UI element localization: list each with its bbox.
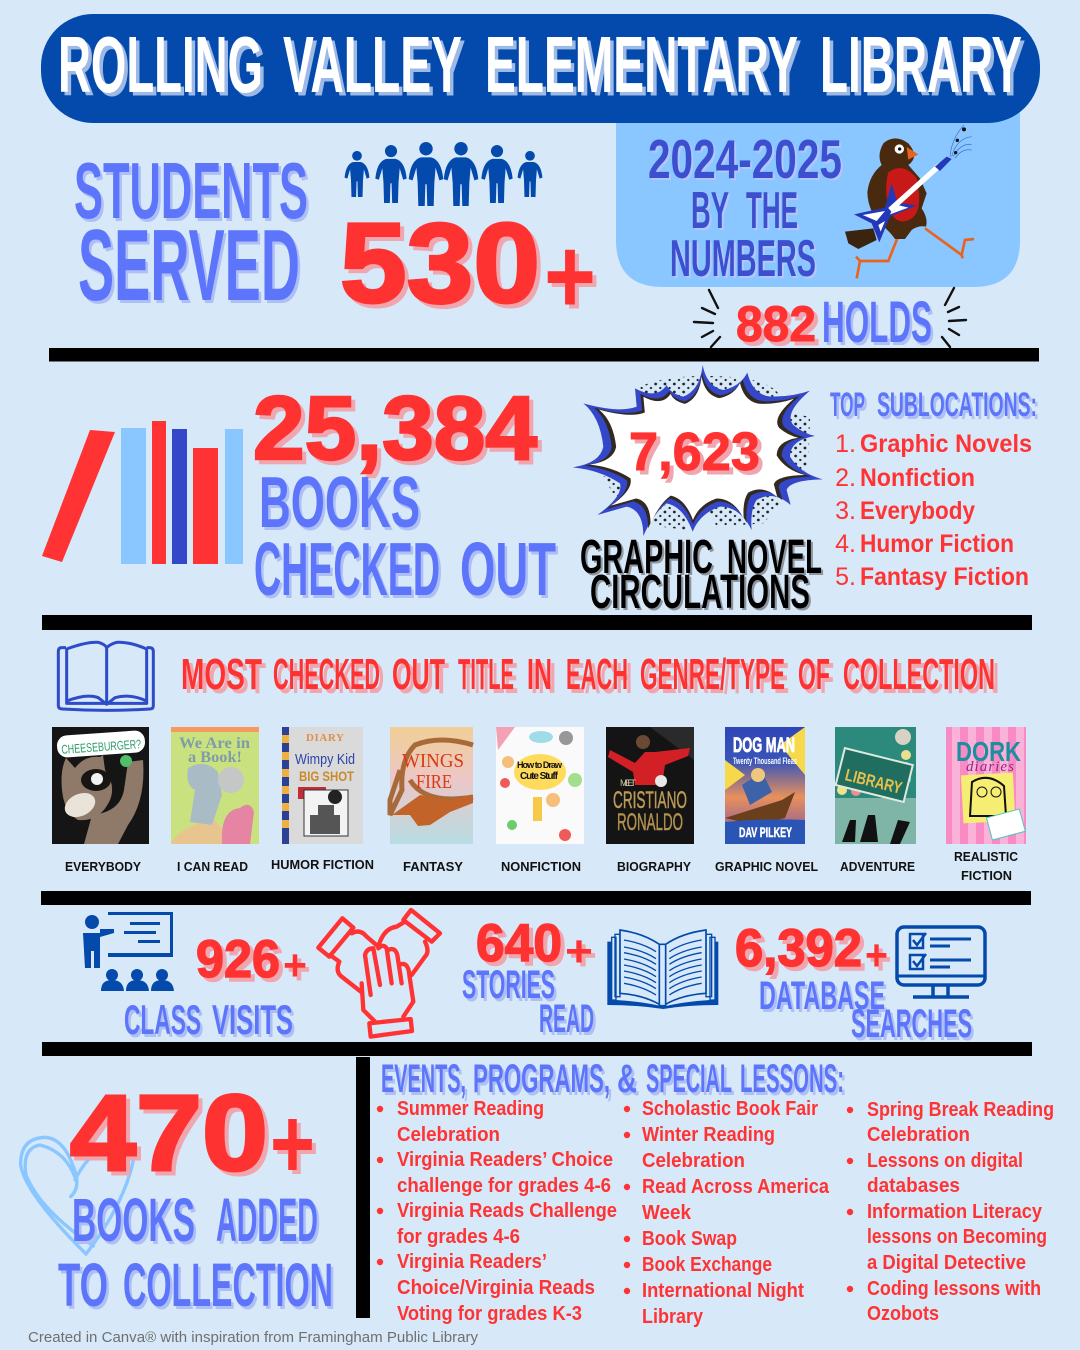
list: top sublocations: Fantasy Fiction xyxy=(860,563,1029,591)
list: top sublocations: 4. xyxy=(835,530,856,558)
heading: most checked out title: OF xyxy=(798,650,830,699)
text: READ xyxy=(539,997,594,1041)
list: top sublocations xyxy=(830,386,1037,591)
book cover: dog man: Twenty Thousand Fleas xyxy=(733,756,797,766)
list: events column 3: lessons on Becoming xyxy=(867,1226,1047,1248)
stat: 6,392+ database searches xyxy=(735,919,972,1046)
labels: genre names: FICTION xyxy=(961,868,1012,883)
list: events column 2: International Night xyxy=(642,1280,804,1302)
heading: events, programs, special lessons: EVENTS, xyxy=(381,1057,466,1101)
book cover: diary of a wimpy kid big shot xyxy=(282,727,363,844)
stat: 640+ stories read: + xyxy=(565,927,593,976)
book cover: we are in a book: a Book! xyxy=(188,749,242,766)
labels: genre names: FANTASY xyxy=(403,859,463,874)
stat: 6,392+ database searches: SEARCHES xyxy=(851,1002,972,1046)
heading: events, programs, special lessons xyxy=(381,1057,844,1101)
book cover: wings of fire: WINGS xyxy=(402,750,464,772)
heading: graphic novel circulations: CIRCULATIONS xyxy=(590,566,810,619)
list: events column 1: Virginia Reads Challenge xyxy=(397,1200,617,1222)
book cover: dog man: DAV PILKEY xyxy=(739,824,792,840)
book cover: are you a cheeseburger: CHEESEBURGER? xyxy=(61,737,142,757)
labels: genre names: I CAN READ xyxy=(177,859,248,874)
stat: 6,392+ database searches: + xyxy=(865,931,888,980)
list: events column 3: Lessons on digital xyxy=(867,1150,1023,1172)
book cover: dork diaries: diaries xyxy=(966,759,1014,775)
book cover: mr lemoncello's library: LIBRARY xyxy=(843,765,905,798)
list: events column 2 xyxy=(624,1098,830,1328)
list: events column 2: Book Exchange xyxy=(642,1254,772,1276)
list: events column 1: challenge for grades 4-6 xyxy=(397,1175,611,1197)
heading: events, programs, special lessons: & xyxy=(617,1057,637,1101)
stat: 882 holds xyxy=(694,288,966,355)
title banner: ELEMENTARY xyxy=(485,20,798,109)
book cover: dog man: DOG MAN xyxy=(733,734,795,757)
stat: 470+ books added: ADDED xyxy=(216,1186,318,1254)
list: events column 3: Coding lessons with xyxy=(867,1278,1041,1300)
list: events column 2: Book Swap xyxy=(642,1228,737,1250)
list: top sublocations: Everybody xyxy=(860,497,975,525)
labels: genre names: BIOGRAPHY xyxy=(617,859,691,874)
icon: stack of books xyxy=(42,421,243,564)
heading: most checked out title: OUT xyxy=(392,650,445,699)
labels: genre names: GRAPHIC NOVEL xyxy=(715,859,818,874)
stat: 882 holds: 882 xyxy=(736,296,816,352)
icon: teacher and class xyxy=(83,912,174,991)
list: events column 1: Summer Reading xyxy=(397,1098,544,1120)
stat: 470+ books added: + xyxy=(270,1088,315,1200)
list: events column 1: Voting for grades K-3 xyxy=(397,1303,582,1325)
book cover: meet cristiano ronaldo: RONALDO xyxy=(617,809,683,836)
stat: 640+ stories read: 640 xyxy=(476,914,562,973)
list: top sublocations: 2. xyxy=(835,464,856,492)
stat: 640+ stories read xyxy=(462,914,594,1041)
stat: 926+ class visits: CLASS xyxy=(124,996,201,1043)
panel: by the numbers: THE xyxy=(746,182,798,240)
stat: books checked out xyxy=(253,379,556,611)
heading: students served: STUDENTS xyxy=(74,146,308,235)
stat: 926+ class visits xyxy=(124,930,307,1043)
list: top sublocations: 1. xyxy=(835,430,856,458)
panel: by the numbers xyxy=(616,100,1020,288)
book cover: how to draw cute stuff xyxy=(496,727,584,844)
book cover: meet cristiano ronaldo: CRISTIANO xyxy=(613,787,687,814)
heading: graphic novel circulations: NOVEL xyxy=(727,531,822,584)
book cover: meet cristiano ronaldo: MEET xyxy=(620,778,636,788)
heading: most checked out title: IN xyxy=(527,650,552,699)
book cover: how to draw cute stuff: How to Draw xyxy=(517,760,563,770)
labels: genre names: HUMOR FICTION xyxy=(271,857,374,872)
list: top sublocations: Humor Fiction xyxy=(860,530,1014,558)
stat: 640+ stories read: STORIES xyxy=(462,963,555,1007)
title banner xyxy=(41,14,1040,123)
stat: 6,392+ database searches: 6,392 xyxy=(735,919,862,978)
stat: 6,392+ database searches: DATABASE xyxy=(759,974,885,1018)
list: top sublocations: Nonfiction xyxy=(860,464,975,492)
list: events column 3: a Digital Detective xyxy=(867,1252,1026,1274)
list: events column 3: Information Literacy xyxy=(867,1201,1043,1223)
stat: books checked out: 25,384 xyxy=(253,379,537,479)
number: students served xyxy=(340,200,596,336)
heading: most checked out title: EACH xyxy=(566,650,628,699)
stat: 470+ books added: BOOKS xyxy=(72,1186,195,1254)
list: events column 2: Celebration xyxy=(642,1150,745,1172)
book cover: meet cristiano ronaldo xyxy=(606,727,694,844)
list: events column 1: Choice/Virginia Reads xyxy=(397,1277,595,1299)
heading: most checked out title xyxy=(181,650,995,699)
book cover: dog man xyxy=(725,727,805,844)
panel: by the numbers: NUMBERS xyxy=(670,230,816,288)
list: events column 1: Virginia Readers’ xyxy=(397,1251,547,1273)
list: events column 2: Scholastic Book Fair xyxy=(642,1098,818,1120)
list: events column 3 xyxy=(847,1099,1054,1325)
icon: stacked hands xyxy=(318,910,440,1037)
stat: 926+ class visits: + xyxy=(283,941,307,990)
list: events column 1: Celebration xyxy=(397,1124,500,1146)
list: top sublocations: TOP xyxy=(830,386,865,424)
stat: books checked out: CHECKED xyxy=(254,527,440,611)
labels: genre names xyxy=(65,849,1019,883)
heading: events, programs, special lessons: PROGRAMS, xyxy=(473,1057,610,1101)
title banner: ROLLING xyxy=(58,20,263,109)
list: top sublocations: Graphic Novels xyxy=(860,430,1032,458)
book cover: are you a cheeseburger xyxy=(52,727,149,844)
list: events column 1: for grades 4-6 xyxy=(397,1226,520,1248)
list: top sublocations: 5. xyxy=(835,563,856,591)
stat: 470+ books added: 470 xyxy=(70,1072,268,1193)
heading: students served: SERVED xyxy=(78,210,300,322)
book cover: wings of fire xyxy=(390,727,473,844)
list: events column 3: databases xyxy=(867,1175,960,1197)
book cover: dork diaries xyxy=(946,727,1026,844)
list: events column 2: Week xyxy=(642,1202,692,1224)
icon: comic burst with 7,623: 7,623 xyxy=(629,422,760,482)
list: events column 1 xyxy=(377,1098,617,1325)
heading: most checked out title: TITLE xyxy=(458,650,514,699)
stat: 470+ books added: COLLECTION xyxy=(123,1251,333,1319)
icon: students group xyxy=(345,142,542,206)
list: events column 2: Read Across America xyxy=(642,1176,830,1198)
list: top sublocations: 3. xyxy=(835,497,856,525)
heading: most checked out title: CHECKED xyxy=(273,650,380,699)
labels: genre names: EVERYBODY xyxy=(65,859,141,874)
stat: books checked out: OUT xyxy=(460,527,556,611)
labels: genre names: ADVENTURE xyxy=(840,859,915,874)
icon: robin playing guitar xyxy=(845,125,974,278)
number: students served: + xyxy=(544,215,596,336)
icon: computer checklist xyxy=(897,927,985,997)
list: events column 1: Virginia Readers’ Choice xyxy=(397,1149,613,1171)
icon: comic burst with 7,623 xyxy=(573,365,823,536)
heading: students served xyxy=(74,146,308,322)
heading: events, programs, special lessons: SPECIAL xyxy=(646,1057,732,1101)
panel: by the numbers: 2024-2025 xyxy=(648,128,842,190)
stat: 470+ books added xyxy=(58,1072,333,1319)
book cover: dork diaries: DORK xyxy=(956,736,1021,767)
icon: open book outline xyxy=(58,642,153,710)
labels: genre names: NONFICTION xyxy=(501,859,581,874)
list: events column 3: Celebration xyxy=(867,1124,970,1146)
title banner: VALLEY xyxy=(283,20,462,109)
heading: most checked out title: MOST xyxy=(181,650,262,699)
book cover: we are in a book xyxy=(171,727,259,844)
stat: 470+ books added: TO xyxy=(58,1251,108,1319)
book cover: diary of a wimpy kid big shot: BIG SHOT xyxy=(299,768,354,784)
stat: books checked out: BOOKS xyxy=(259,463,420,543)
book cover: wings of fire: FIRE xyxy=(416,771,452,793)
book cover: diary of a wimpy kid big shot: DIARY xyxy=(306,732,344,744)
number: students served: 530 xyxy=(340,200,540,326)
heading: graphic novel circulations: GRAPHIC xyxy=(580,531,713,584)
book cover: mr lemoncello's library xyxy=(835,727,916,844)
list: events column 3: Spring Break Reading xyxy=(867,1099,1054,1121)
heading: events, programs, special lessons: LESSONS: xyxy=(740,1057,844,1101)
heading: most checked out title: GENRE/TYPE xyxy=(640,650,785,699)
stat: 926+ class visits: 926 xyxy=(196,930,280,989)
icon: blue heart outline xyxy=(21,1137,134,1254)
stat: 882 holds: HOLDS xyxy=(822,290,932,355)
stat: 926+ class visits: VISITS xyxy=(212,996,293,1043)
book cover: we are in a book: We Are in xyxy=(179,735,250,752)
icon: open book with lines xyxy=(607,930,718,1009)
book cover: diary of a wimpy kid big shot: Wimpy Kid xyxy=(295,751,355,768)
list: events column 2: Library xyxy=(642,1306,704,1328)
credit line: Created in Canva® with inspiration from Framingham Public Library xyxy=(28,1329,478,1346)
list: events column 3: Ozobots xyxy=(867,1303,939,1325)
heading: graphic novel circulations xyxy=(580,531,822,619)
labels: genre names: REALISTIC xyxy=(954,849,1019,864)
list: events column 2: Winter Reading xyxy=(642,1124,775,1146)
book cover: how to draw cute stuff: Cute Stuff xyxy=(520,771,559,782)
panel: by the numbers: BY xyxy=(691,182,729,240)
